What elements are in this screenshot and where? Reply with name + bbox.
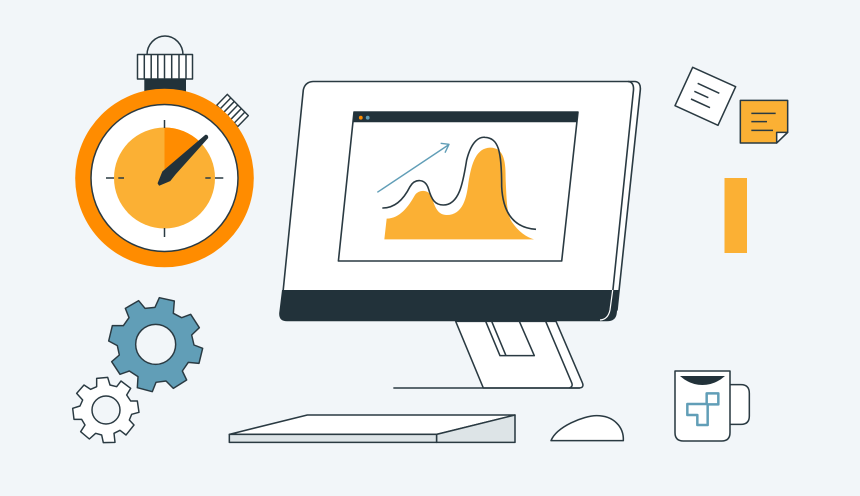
stopwatch tick marks [106,120,223,237]
stopwatch neck [144,79,186,97]
monitor chin highlight [600,290,613,320]
keyboard front [229,434,437,442]
title bar dot blue [366,116,370,120]
stopwatch crown [138,54,192,79]
icon: stopwatch [75,36,254,267]
keyboard top [229,415,515,434]
stand ground line [393,386,580,390]
stand slot [486,321,534,356]
sticky note orange [740,100,788,143]
screen window [338,112,578,261]
area chart [377,137,536,239]
icon: mug [675,371,749,441]
title bar dot orange [359,116,363,120]
window title bar [353,112,578,122]
monitor stand [393,321,583,388]
sticky note white [675,67,736,125]
icon: blue gear [109,298,203,392]
elapsed time wedge [164,127,200,178]
mug coffee crescent [680,376,725,385]
orange bar [724,178,747,253]
chart line [382,137,536,229]
mug handle [730,385,749,424]
mouse [551,416,623,441]
mug body [675,371,730,441]
keyboard side [437,415,515,442]
monitor front edge [613,82,634,292]
icon: white gear [73,377,139,443]
stopwatch loop [147,36,183,55]
stopwatch orange case [75,89,254,267]
stand body [456,321,583,388]
stopwatch dial disc [114,128,215,228]
stand inner edge [546,321,572,388]
stopwatch hand [158,135,208,185]
keyboard [229,415,515,442]
mug logo [687,393,718,425]
chart filled area [384,148,534,239]
chart trend arrow [377,143,449,192]
monitor back shell [281,82,640,310]
monitor [279,82,640,321]
stopwatch white face [91,104,238,252]
monitor dark chin [279,290,619,321]
stopwatch side button [217,94,248,127]
